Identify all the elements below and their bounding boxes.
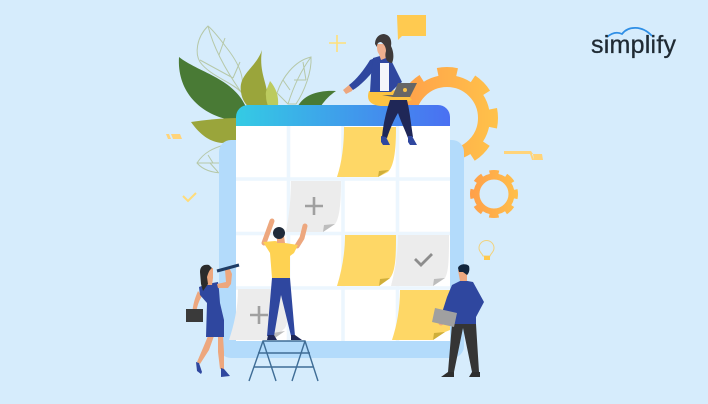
leaf: light green <box>266 81 278 106</box>
shoes <box>381 136 417 145</box>
leaf: olive upper <box>241 50 268 108</box>
logo wordmark: simplify <box>591 31 676 59</box>
neck and face <box>458 270 467 281</box>
laptop <box>382 83 417 97</box>
head and hair <box>377 44 386 60</box>
dress <box>199 282 224 337</box>
shoes <box>441 372 480 377</box>
logo: simplify <box>591 28 676 59</box>
icon: large gear <box>402 72 492 164</box>
hand <box>438 320 444 326</box>
leaf outline: lower left <box>197 145 224 173</box>
leaf: dark green small <box>298 91 336 106</box>
arms <box>264 221 305 246</box>
shirt <box>263 241 298 278</box>
icon: light bulb <box>479 241 494 260</box>
leaf outline: top <box>197 26 243 92</box>
trousers <box>448 324 479 372</box>
figure: woman with telescope <box>186 265 239 377</box>
icon: right dash decoration <box>504 151 543 160</box>
shoes <box>267 335 302 340</box>
torso <box>370 56 402 92</box>
lap <box>368 90 412 106</box>
sticky note: yellow bottom <box>392 290 450 340</box>
calendar page <box>236 120 450 341</box>
sticky note: grey check <box>391 235 449 286</box>
folder <box>432 308 457 327</box>
arm <box>192 291 202 321</box>
legs <box>382 100 413 138</box>
trousers <box>267 278 295 336</box>
book <box>186 309 203 322</box>
icon: speech bubble <box>397 15 426 40</box>
panel: calendar <box>236 105 450 341</box>
logo cloud arc <box>607 28 652 37</box>
leaves behind the calendar <box>179 26 336 173</box>
icon: left dash decoration <box>166 134 182 139</box>
shoes <box>196 362 230 377</box>
sticky note: grey plus <box>286 181 341 232</box>
leaf: olive lower <box>191 118 238 143</box>
figure: man on ladder <box>249 221 318 381</box>
neck <box>277 236 285 243</box>
legs <box>197 336 224 369</box>
hair <box>458 264 469 275</box>
leaf: dark green large <box>179 57 245 120</box>
ladder <box>249 341 318 381</box>
calendar header <box>236 105 450 126</box>
figure: woman sitting with laptop <box>343 34 417 145</box>
sticky note: yellow top <box>337 127 396 177</box>
calendar grid <box>236 126 450 341</box>
sticky note: grey plus lower <box>229 289 288 340</box>
head <box>273 227 285 239</box>
head and hair <box>207 268 213 285</box>
telescope <box>217 265 239 271</box>
figure: man with folder <box>432 264 484 377</box>
icon: small gear <box>473 173 515 215</box>
hand and arm <box>343 85 354 94</box>
raised arm <box>217 267 232 288</box>
panel: calendar back board <box>219 140 464 358</box>
leaf outline: right <box>277 57 311 104</box>
icon: yellow check mark <box>183 193 196 201</box>
icon: yellow plus sparkle <box>329 35 346 52</box>
jacket <box>440 280 484 324</box>
sticky note: yellow middle <box>337 235 396 286</box>
